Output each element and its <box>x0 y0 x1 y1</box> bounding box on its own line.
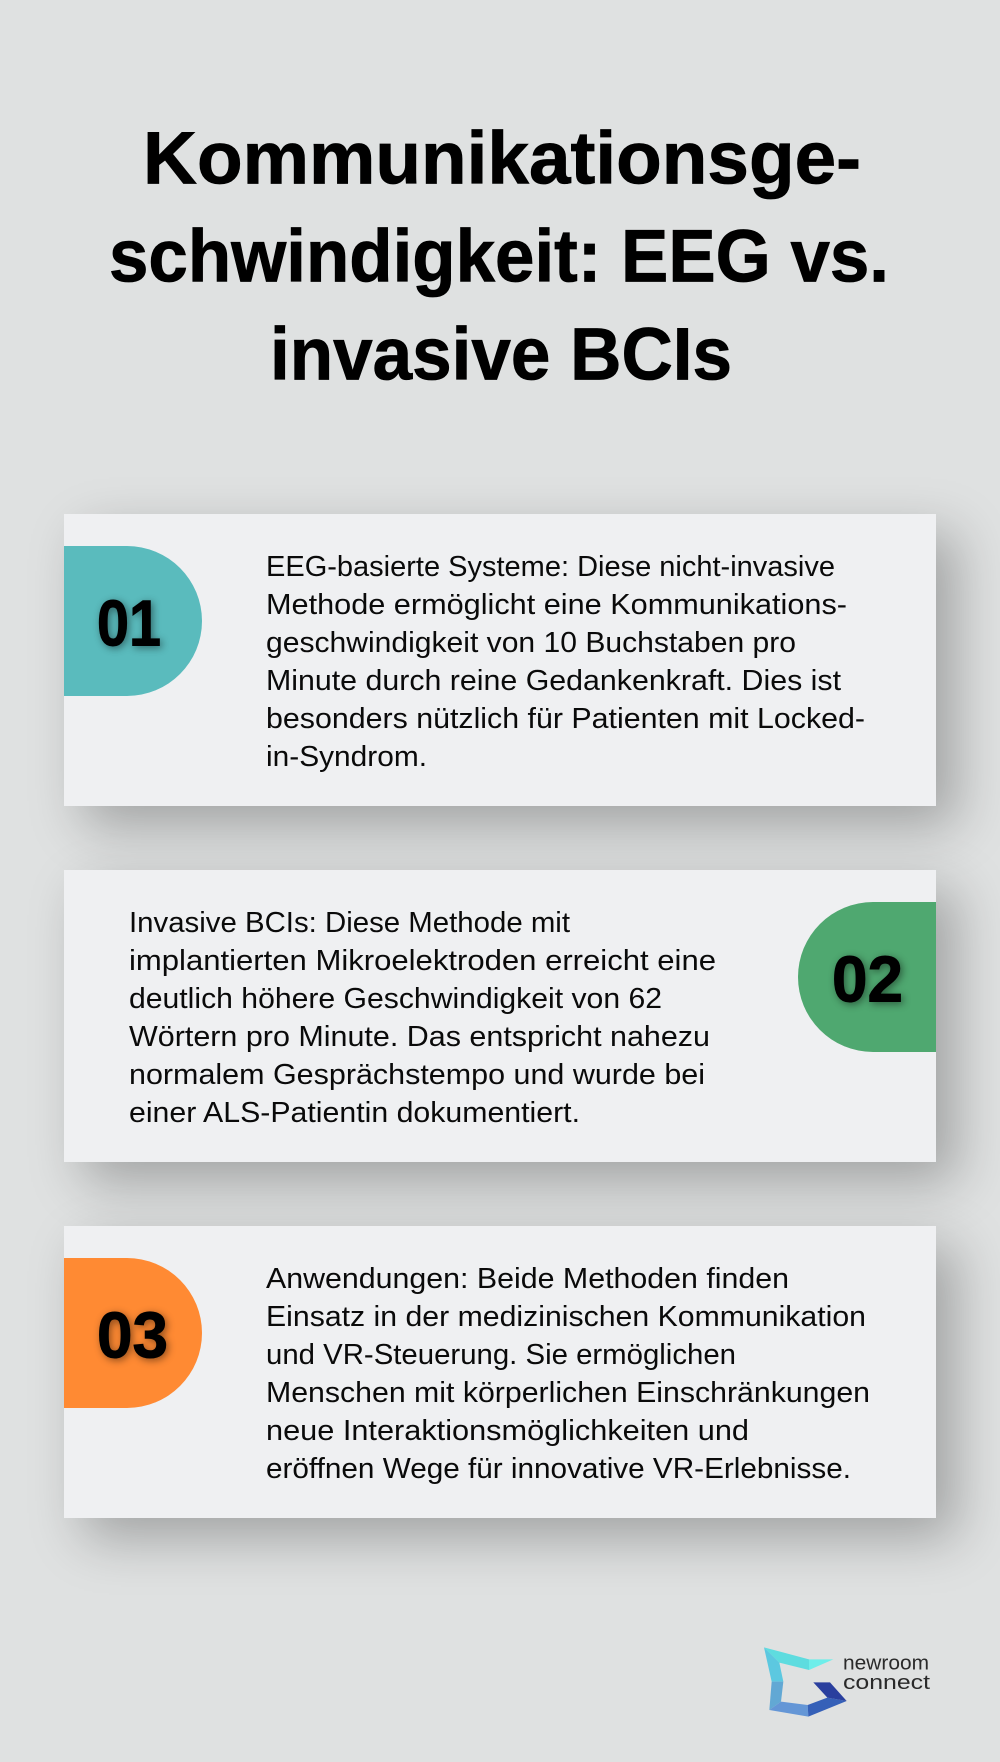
text block: Anwendungen: eröffnen Wege für innovative VR-Erlebnisse. <box>266 1453 851 1485</box>
badge: 01: 01 <box>97 586 161 660</box>
text block: Invasive BCIs: normalem Gesprächstempo und wurde bei <box>129 1059 705 1091</box>
text block: EEG-basierte Systeme: EEG-basierte Systeme: Diese nicht-invasive <box>266 551 835 583</box>
text block: EEG-basierte Systeme: geschwindigkeit von 10 Buchstaben pro <box>266 627 796 659</box>
title <box>109 116 889 396</box>
logo: newroom connect <box>764 1647 931 1717</box>
text block: Anwendungen <box>266 1263 870 1485</box>
text block: Anwendungen: Anwendungen: Beide Methoden finden <box>266 1263 789 1295</box>
title: schwindigkeit: EEG vs. <box>109 214 889 298</box>
text block: Anwendungen: Einsatz in der medizinischen Kommunikation <box>266 1301 866 1333</box>
panel: Invasive BCIs <box>64 870 936 1162</box>
badge: 03 <box>64 1258 202 1408</box>
panel: Anwendungen <box>64 1226 936 1518</box>
text block: Anwendungen: und VR-Steuerung. Sie ermöglichen <box>266 1339 736 1371</box>
title: Kommunikationsge- <box>143 116 861 200</box>
text block: Anwendungen: Menschen mit körperlichen Einschränkungen <box>266 1377 870 1409</box>
badge: 02 <box>798 902 936 1052</box>
logo wordmark <box>843 1652 931 1694</box>
text block: Invasive BCIs: einer ALS-Patientin dokumentiert. <box>129 1097 580 1129</box>
text block: EEG-basierte Systeme: Methode ermöglicht eine Kommunikations- <box>266 589 847 621</box>
text block: EEG-basierte Systeme: besonders nützlich für Patienten mit Locked- <box>266 703 865 735</box>
icon: logo mark <box>764 1647 847 1717</box>
text block: Anwendungen: neue Interaktionsmöglichkeiten und <box>266 1415 749 1447</box>
text block: Invasive BCIs: Invasive BCIs: Diese Methode mit <box>129 907 570 939</box>
text block: Invasive BCIs: deutlich höhere Geschwindigkeit von 62 <box>129 983 662 1015</box>
text block: Invasive BCIs <box>129 907 716 1129</box>
badge: 03: 03 <box>97 1298 168 1372</box>
text block: Invasive BCIs: Wörtern pro Minute. Das entspricht nahezu <box>129 1021 710 1053</box>
title: invasive BCIs <box>270 312 732 396</box>
text block: EEG-basierte Systeme: Minute durch reine Gedankenkraft. Dies ist <box>266 665 841 697</box>
badge: 01 <box>64 546 202 696</box>
text block: Invasive BCIs: implantierten Mikroelektroden erreicht eine <box>129 945 716 977</box>
logo wordmark: newroom <box>843 1652 929 1674</box>
text block: EEG-basierte Systeme <box>266 551 865 773</box>
logo wordmark: connect <box>843 1672 931 1694</box>
badge: 02: 02 <box>832 942 903 1016</box>
panel: EEG-basierte Systeme <box>64 514 936 806</box>
text block: EEG-basierte Systeme: in-Syndrom. <box>266 741 427 773</box>
